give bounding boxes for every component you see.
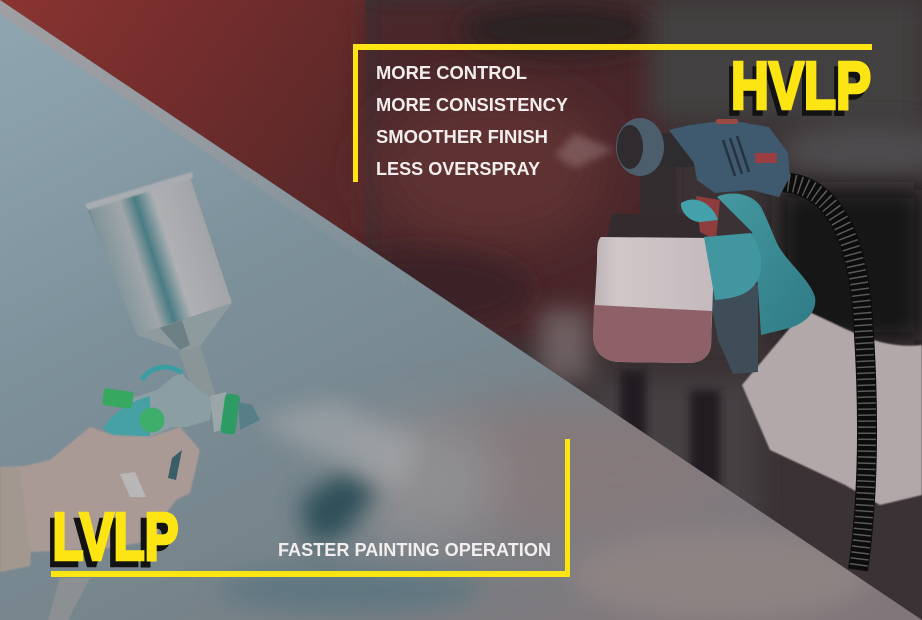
handle: [708, 285, 758, 374]
gun barrel: [660, 133, 700, 167]
text block: HVLP benefit list: MORE CONTROL: [376, 63, 527, 83]
gun body: [103, 367, 232, 437]
trigger: [696, 196, 720, 240]
gun neck: [179, 345, 217, 407]
panel: HVLP benefits: [353, 44, 872, 182]
frame shadow: [51, 576, 572, 580]
heading: HVLP: HVLP: [727, 54, 867, 129]
LVLP spray gun illustration: [0, 172, 420, 620]
yellow frame: HVLP: [353, 44, 872, 182]
text block: LVLP benefit: FASTER PAINTING OPERATION: [278, 540, 551, 560]
heading: LVLP: LVLP: [52, 500, 178, 574]
text block: HVLP benefit list: LESS OVERSPRAY: [376, 159, 540, 179]
yellow frame: LVLP: [51, 439, 570, 577]
nozzle: [238, 402, 260, 430]
text block: HVLP benefit list: [376, 63, 568, 179]
spray mist: [258, 400, 420, 490]
text block: HVLP benefit list: MORE CONSISTENCY: [376, 95, 568, 115]
paint cup: [85, 172, 232, 351]
heading: LVLP: LVLP: [48, 506, 172, 580]
gun body: [669, 119, 790, 197]
nozzle ring: [616, 118, 664, 176]
hand: [20, 427, 200, 552]
hose: [782, 182, 867, 570]
blue glove: [681, 193, 815, 335]
air fitting: [48, 578, 90, 620]
heading: HVLP: HVLP: [731, 48, 871, 124]
paint jar: [593, 237, 715, 363]
jar lid: [606, 214, 706, 245]
text block: HVLP benefit list: SMOOTHER FINISH: [376, 127, 548, 147]
HVLP spray gun illustration: [555, 118, 922, 570]
suit sleeve: [742, 310, 922, 505]
panel: LVLP benefits: [48, 439, 572, 580]
green controls: [102, 388, 240, 435]
spray mist: [555, 133, 614, 168]
sleeve: [0, 466, 34, 572]
cup neck: [640, 165, 678, 222]
